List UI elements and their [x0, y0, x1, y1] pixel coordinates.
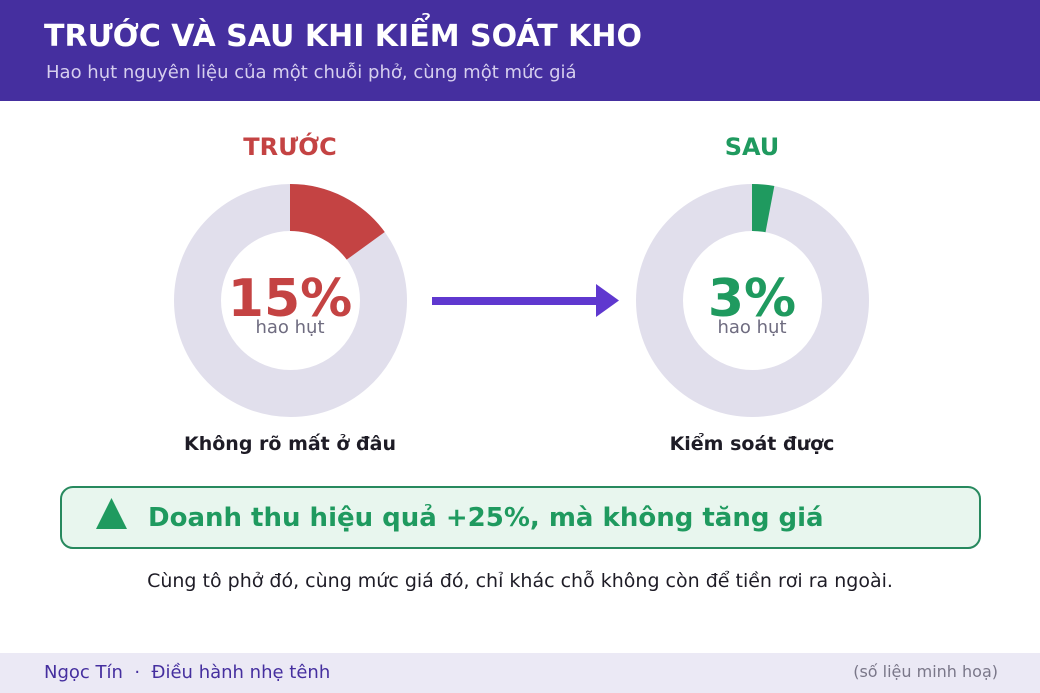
panel: before: [184, 131, 396, 455]
footer credit: Ngọc Tín · Điều hành nhẹ tênh: [44, 662, 330, 683]
callout: [61, 487, 980, 548]
callout text: Doanh thu hiệu quả +25%, mà không tăng giá: [148, 502, 824, 533]
subtitle: Hao hụt nguyên liệu của một chuỗi phở, cùng một mức giá: [46, 62, 577, 83]
donut chart: 15%: [198, 184, 385, 394]
value: 15%: 15%: [228, 269, 352, 329]
heading: after: SAU: [725, 133, 779, 161]
header band: [0, 0, 1040, 101]
note: Cùng tô phở đó, cùng mức giá đó, chỉ khác chỗ không còn để tiền rơi ra ngoài.: [147, 569, 893, 592]
title: TRƯỚC VÀ SAU KHI KIỂM SOÁT KHO: [44, 13, 642, 54]
value caption: hao hụt: [255, 317, 325, 338]
icon: up triangle: [96, 498, 127, 529]
arrow: [432, 284, 619, 317]
caption: before: Không rõ mất ở đâu: [184, 432, 396, 455]
donut chart: 3%: [660, 184, 846, 394]
footer: [0, 653, 1040, 693]
panel: after: [660, 133, 846, 455]
heading: before: TRƯỚC: [243, 131, 337, 161]
value: 3%: 3%: [708, 269, 796, 329]
footer note: (số liệu minh hoạ): [853, 662, 998, 681]
caption: after: Kiểm soát được: [670, 432, 834, 455]
value caption: hao hụt: [717, 317, 787, 338]
